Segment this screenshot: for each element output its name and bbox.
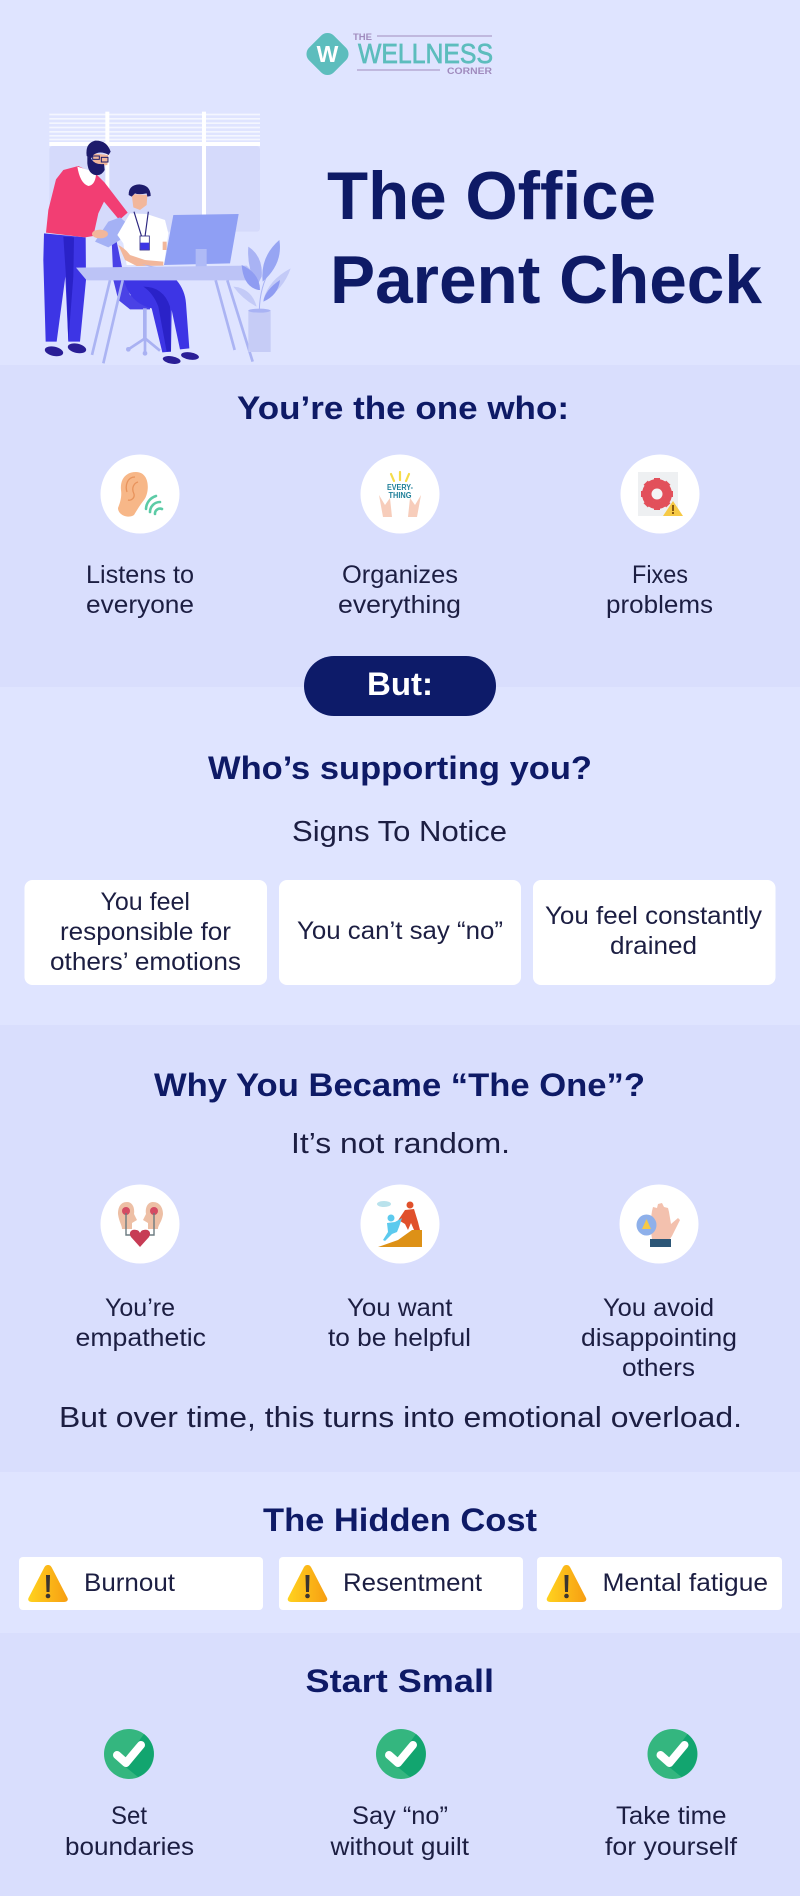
panel: you're the one who [0, 365, 800, 687]
subheading: Signs To Notice [292, 816, 507, 848]
card: can't say no: You can’t say “no” [297, 917, 503, 945]
title [327, 158, 762, 318]
statement: But over time, this turns into emotional overload. [59, 1402, 742, 1434]
item: take time for yourself: for yourself [605, 1833, 737, 1861]
item: take time for yourself: Take time [616, 1802, 726, 1830]
card: resentment: Resentment [343, 1569, 482, 1597]
logo: The Wellness Corner [303, 29, 493, 79]
item: organizes everything: everything [338, 591, 461, 619]
heading: Who’s supporting you? [208, 750, 592, 786]
heading: You’re the one who: [237, 390, 569, 426]
potted plant [233, 240, 291, 352]
logo text: CORNER [447, 66, 493, 76]
panel: the hidden cost [0, 1472, 800, 1633]
seated man's legs [124, 280, 199, 365]
item: organizes everything: THING [388, 491, 412, 500]
item: avoid disappointing others: disappointing [581, 1324, 737, 1352]
card: mental fatigue: Mental fatigue [602, 1569, 768, 1597]
seated man [117, 184, 168, 266]
item: say no without guilt [329, 1729, 469, 1861]
item: listens to everyone [86, 454, 194, 619]
card: can't say no [279, 880, 521, 985]
office chair [112, 238, 160, 356]
item: avoid disappointing others: others [622, 1354, 695, 1382]
logo text: THE [353, 32, 372, 43]
item: set boundaries: Set [111, 1802, 147, 1830]
card: burnout: Burnout [84, 1569, 175, 1597]
card: burnout [19, 1557, 263, 1610]
item: want to be helpful [328, 1184, 471, 1352]
item: fixes problems: problems [606, 591, 713, 619]
item: avoid disappointing others: You avoid [603, 1294, 714, 1322]
item: want to be helpful: to be helpful [328, 1324, 471, 1352]
item: organizes everything [338, 454, 461, 619]
item: empathetic: empathetic [76, 1324, 206, 1352]
item: set boundaries: boundaries [65, 1833, 194, 1861]
item: fixes problems [606, 454, 713, 619]
pill: But [304, 656, 496, 716]
item: listens to everyone: Listens to [86, 561, 194, 589]
item: fixes problems: Fixes [632, 561, 688, 589]
logo text: WELLNESS [358, 38, 493, 69]
card: responsible for emotions: others’ emotions [50, 948, 241, 976]
item: want to be helpful: You want [347, 1294, 453, 1322]
computer monitor [142, 214, 239, 272]
item: empathetic: You’re [105, 1294, 175, 1322]
heading: Why You Became “The One”? [154, 1067, 645, 1103]
heading: Start Small [306, 1663, 494, 1699]
item: empathetic [76, 1184, 206, 1352]
item: organizes everything: EVERY- [387, 483, 413, 492]
title: The Office [327, 158, 656, 234]
card: constantly drained: drained [610, 932, 697, 960]
standing man [43, 141, 129, 358]
card: constantly drained [533, 880, 776, 985]
icon: logo diamond: W [317, 41, 339, 67]
item: set boundaries [65, 1729, 194, 1861]
title: Parent Check [330, 242, 762, 318]
icon: logo diamond [303, 29, 352, 79]
logo text [353, 32, 493, 76]
window blinds and pane [49, 112, 260, 232]
panel: why you became the one [0, 1025, 800, 1472]
pill: But: But: [367, 666, 433, 702]
card: responsible for emotions: You feel [100, 888, 190, 916]
item: listens to everyone: everyone [86, 591, 194, 619]
item: avoid disappointing others [581, 1184, 737, 1382]
card: constantly drained: You feel constantly [545, 902, 763, 930]
card: resentment [279, 1557, 523, 1610]
item: say no without guilt: without guilt [329, 1833, 469, 1861]
subheading: It’s not random. [291, 1128, 510, 1160]
card: responsible for emotions [24, 880, 267, 985]
panel: start small [0, 1633, 800, 1896]
card: responsible for emotions: responsible for [60, 918, 231, 946]
card: mental fatigue [537, 1557, 782, 1610]
item: take time for yourself [605, 1729, 737, 1861]
desk [76, 266, 257, 363]
heading: The Hidden Cost [263, 1502, 537, 1538]
illustration: two colleagues at a desk [43, 112, 291, 365]
panel: who's supporting you [0, 687, 800, 1025]
item: say no without guilt: Say “no” [352, 1802, 448, 1830]
item: organizes everything: Organizes [342, 561, 458, 589]
